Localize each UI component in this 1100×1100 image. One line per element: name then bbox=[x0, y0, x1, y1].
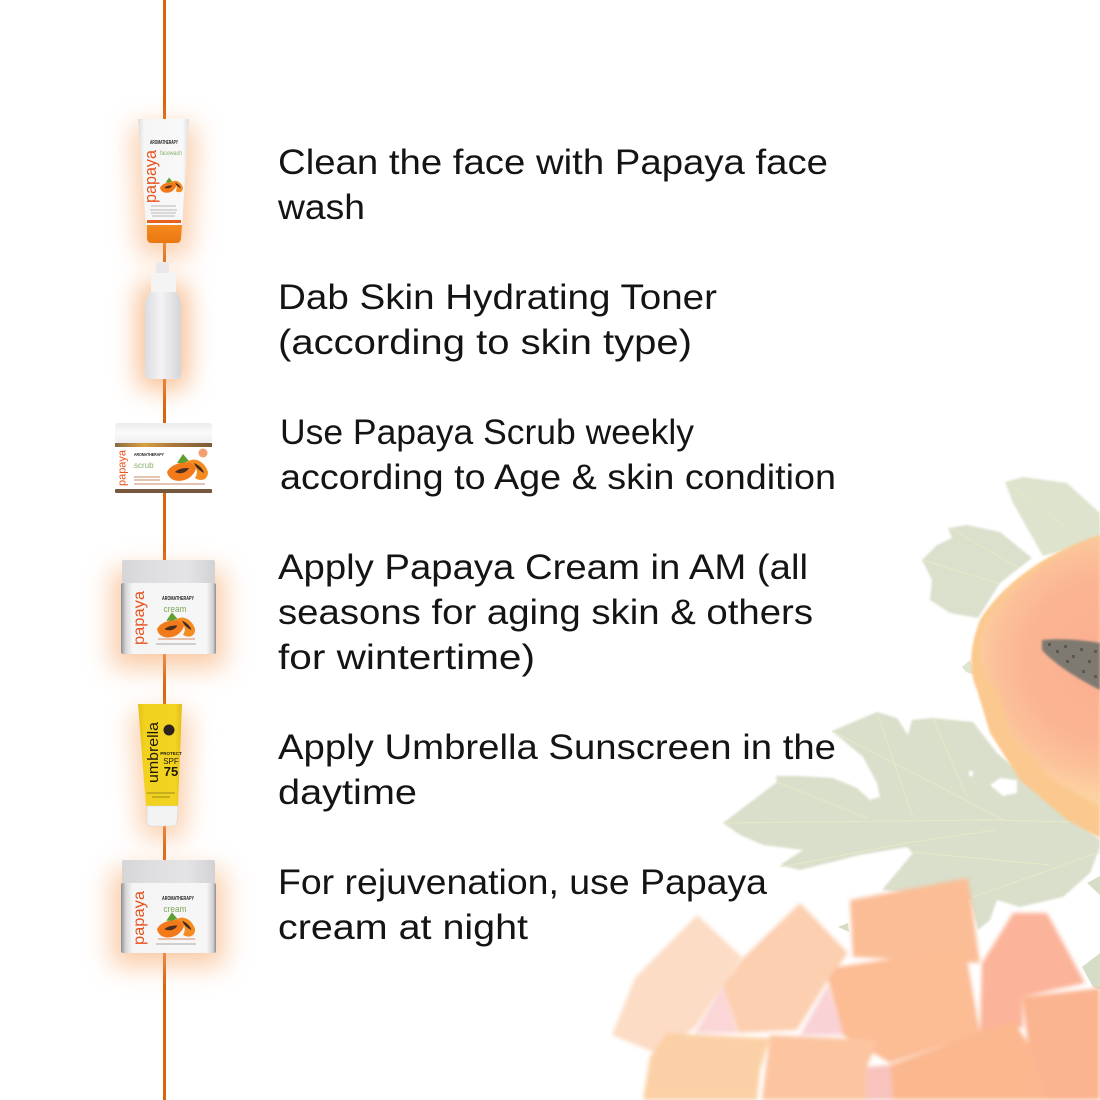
product: papaya cream jar night bbox=[112, 860, 224, 966]
leaf bits: right edge bbox=[838, 876, 1100, 990]
pink shadow right bbox=[800, 985, 843, 1035]
cube gap bbox=[866, 1065, 893, 1100]
step 2 text bbox=[278, 278, 717, 362]
jar type: scrub bbox=[134, 461, 154, 470]
step 3 text: Use Papaya Scrub weekly bbox=[280, 413, 694, 452]
small text bbox=[147, 793, 175, 797]
product: papaya face wash tube bbox=[132, 119, 196, 256]
step 4 text: Apply Papaya Cream in AM (all bbox=[278, 548, 808, 587]
glow bbox=[138, 283, 188, 389]
jar body bbox=[121, 883, 216, 953]
tube cap bbox=[147, 225, 182, 243]
papaya half: skin bbox=[971, 535, 1100, 838]
product: toner bottle bbox=[138, 262, 188, 389]
step 6 text: For rejuvenation, use Papaya bbox=[278, 863, 768, 902]
papaya cubes bbox=[612, 878, 1100, 1100]
leaf: upper left of papaya bbox=[922, 525, 1032, 618]
leaf: top right bbox=[1005, 477, 1100, 556]
papaya seeds bbox=[1042, 639, 1100, 690]
jar name: papaya bbox=[116, 449, 128, 486]
jar small text bbox=[158, 638, 195, 640]
step 4 text: for wintertime) bbox=[278, 638, 535, 677]
glow bbox=[112, 870, 224, 966]
tube small text bbox=[150, 206, 177, 216]
jar fruit bbox=[157, 612, 195, 637]
collar bbox=[151, 273, 176, 294]
cube: second bbox=[723, 903, 848, 1033]
step 4 text: seasons for aging skin & others bbox=[278, 593, 813, 632]
product: umbrella sunscreen tube bbox=[132, 704, 190, 838]
jar small text bbox=[134, 477, 205, 484]
tube brand: AROMATHERAPY bbox=[150, 140, 178, 146]
cube: bottom middle bbox=[762, 1035, 878, 1100]
leaf holes bbox=[969, 771, 1017, 796]
jar body bbox=[115, 447, 212, 489]
SPF label: PROTECT bbox=[160, 751, 182, 756]
timeline vertical line bbox=[163, 0, 166, 1100]
papaya half: flesh bbox=[980, 537, 1100, 807]
step 1 text: wash bbox=[277, 188, 365, 227]
cube: bottom right bbox=[890, 1020, 1045, 1100]
jar brand: AROMATHERAPY bbox=[162, 896, 194, 902]
lid bbox=[122, 860, 215, 883]
jar fruit bbox=[167, 454, 208, 481]
small leaf tip by papaya bbox=[962, 660, 975, 675]
step 6 text: cream at night bbox=[278, 908, 528, 947]
bottom band bbox=[115, 489, 212, 493]
step 2 text: (according to skin type) bbox=[278, 323, 692, 362]
step 5 text: Apply Umbrella Sunscreen in the bbox=[278, 728, 836, 767]
jar name: papaya bbox=[131, 891, 148, 945]
step 3 text: according to Age & skin condition bbox=[280, 458, 836, 497]
nozzle bbox=[156, 262, 169, 274]
SPF word: SPF bbox=[163, 757, 179, 766]
glow bbox=[132, 712, 190, 838]
jar badge bbox=[198, 448, 208, 458]
cube: far right bbox=[1022, 988, 1100, 1100]
glow bbox=[132, 125, 196, 256]
step 6 text bbox=[278, 863, 768, 947]
jar type: cream bbox=[164, 904, 186, 914]
SPF number: 75 bbox=[164, 764, 178, 779]
glow bbox=[112, 570, 224, 668]
tube name: papaya bbox=[141, 149, 160, 203]
cube: top bbox=[850, 878, 980, 963]
cube: middle bbox=[828, 948, 980, 1063]
step 2 text: Dab Skin Hydrating Toner bbox=[278, 278, 717, 317]
pink shadow left bbox=[695, 985, 737, 1033]
step 1 text bbox=[277, 143, 828, 227]
leaf veins bbox=[723, 487, 1100, 897]
cube: right bbox=[980, 913, 1085, 1033]
bottle body bbox=[145, 292, 181, 379]
jar brand: AROMATHERAPY bbox=[134, 452, 164, 457]
tube stripe bbox=[147, 220, 181, 223]
tube cap bbox=[147, 806, 178, 826]
tube type: facewash bbox=[160, 150, 182, 157]
tube name: umbrella bbox=[146, 721, 162, 783]
tube fruit bbox=[160, 178, 183, 193]
lid bbox=[115, 423, 212, 443]
cube: leftmost bbox=[612, 915, 742, 1052]
tube body bbox=[138, 704, 182, 806]
tube body bbox=[138, 119, 189, 226]
step 5 text: daytime bbox=[278, 773, 417, 812]
jar body bbox=[121, 583, 216, 654]
product: papaya cream jar AM bbox=[112, 560, 224, 668]
lid bbox=[122, 560, 215, 583]
portrait bbox=[164, 724, 174, 736]
step 4 text bbox=[278, 548, 813, 677]
background photo: papaya and leaves bbox=[612, 477, 1100, 1100]
step 1 text: Clean the face with Papaya face bbox=[278, 143, 828, 182]
leaf: large lower bbox=[723, 712, 1100, 930]
jar name: papaya bbox=[131, 591, 148, 645]
step 5 text bbox=[278, 728, 836, 812]
jar small text bbox=[158, 938, 195, 940]
jar brand: AROMATHERAPY bbox=[162, 596, 194, 602]
step 3 text bbox=[280, 413, 836, 497]
jar fruit bbox=[157, 912, 195, 937]
cube: bottom left bbox=[643, 1033, 770, 1100]
jar type: cream bbox=[164, 604, 186, 614]
brown band bbox=[115, 443, 212, 447]
product: papaya scrub jar bbox=[115, 423, 212, 493]
